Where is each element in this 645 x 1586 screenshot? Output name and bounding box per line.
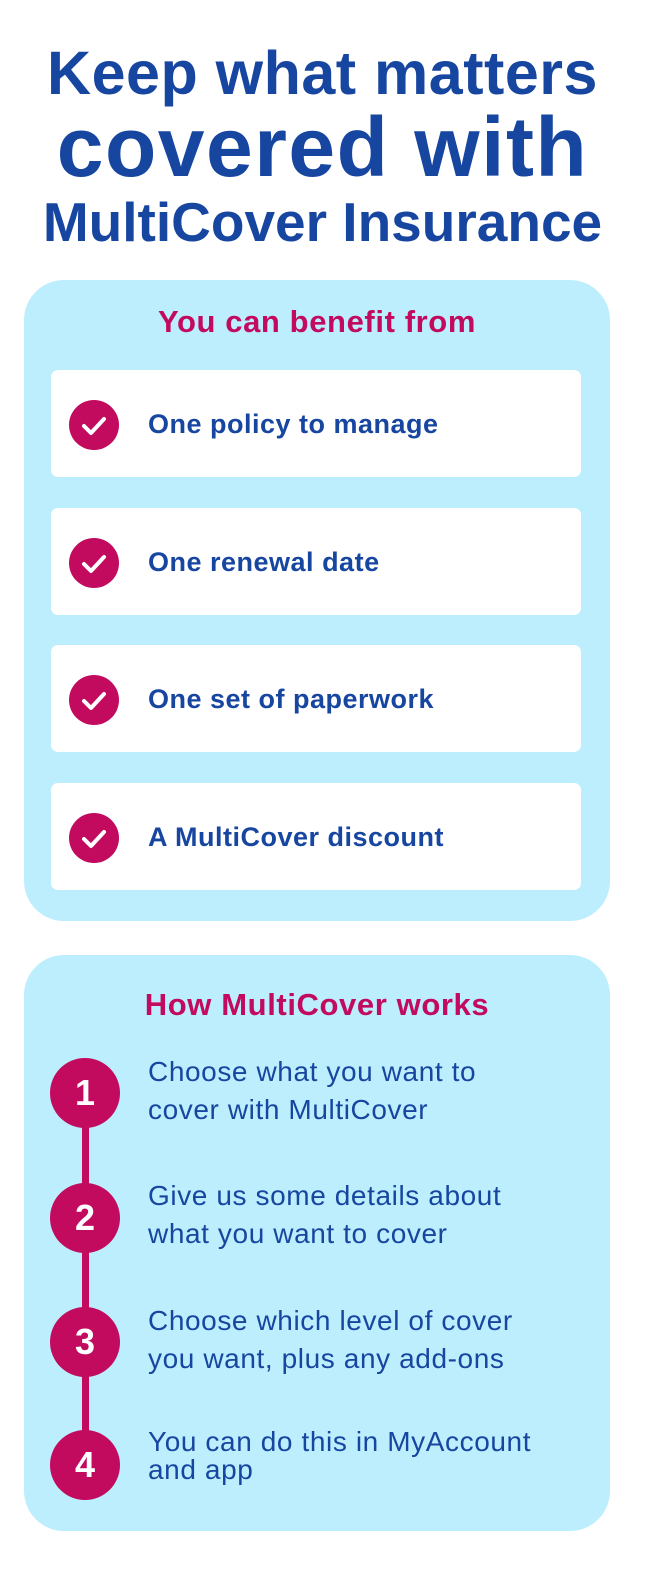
step 2: Give us some details about bbox=[148, 1180, 501, 1211]
title bbox=[43, 39, 602, 253]
step 4: You can do this in MyAccount bbox=[148, 1426, 531, 1457]
step 4: and app bbox=[148, 1454, 253, 1485]
title: MultiCover Insurance bbox=[43, 191, 602, 253]
title: Keep what matters bbox=[47, 39, 598, 107]
card 3: One set of paperwork bbox=[148, 684, 434, 714]
step 2: 2 bbox=[75, 1197, 95, 1238]
card 1 bbox=[51, 370, 581, 477]
step 1: Choose what you want to bbox=[148, 1056, 476, 1087]
icon: check bbox=[69, 538, 119, 588]
card 1: One policy to manage bbox=[148, 409, 439, 439]
step 3: you want, plus any add-ons bbox=[148, 1343, 504, 1374]
card 2 bbox=[51, 508, 581, 615]
icon: check bbox=[69, 675, 119, 725]
card 3 bbox=[51, 645, 581, 752]
step 3: Choose which level of cover bbox=[148, 1305, 513, 1336]
step 1 bbox=[50, 1056, 476, 1128]
card 2: One renewal date bbox=[148, 547, 380, 577]
step 3: 3 bbox=[75, 1321, 95, 1362]
title: covered with bbox=[57, 100, 588, 194]
card 4: A MultiCover discount bbox=[148, 822, 444, 852]
step 3 bbox=[50, 1305, 513, 1377]
card 4 bbox=[51, 783, 581, 890]
step 4 bbox=[50, 1426, 531, 1500]
panel: how it works bbox=[24, 955, 610, 1531]
step 2 bbox=[50, 1180, 501, 1253]
heading: benefits: You can benefit from bbox=[158, 304, 476, 339]
timeline line bbox=[82, 1095, 89, 1465]
heading: how: How MultiCover works bbox=[145, 987, 489, 1022]
step 1: cover with MultiCover bbox=[148, 1094, 428, 1125]
step 4: 4 bbox=[75, 1444, 95, 1485]
step 2: what you want to cover bbox=[148, 1218, 448, 1249]
icon: check bbox=[69, 813, 119, 863]
step 1: 1 bbox=[75, 1072, 95, 1113]
panel: benefits bbox=[24, 280, 610, 921]
icon: check bbox=[69, 400, 119, 450]
